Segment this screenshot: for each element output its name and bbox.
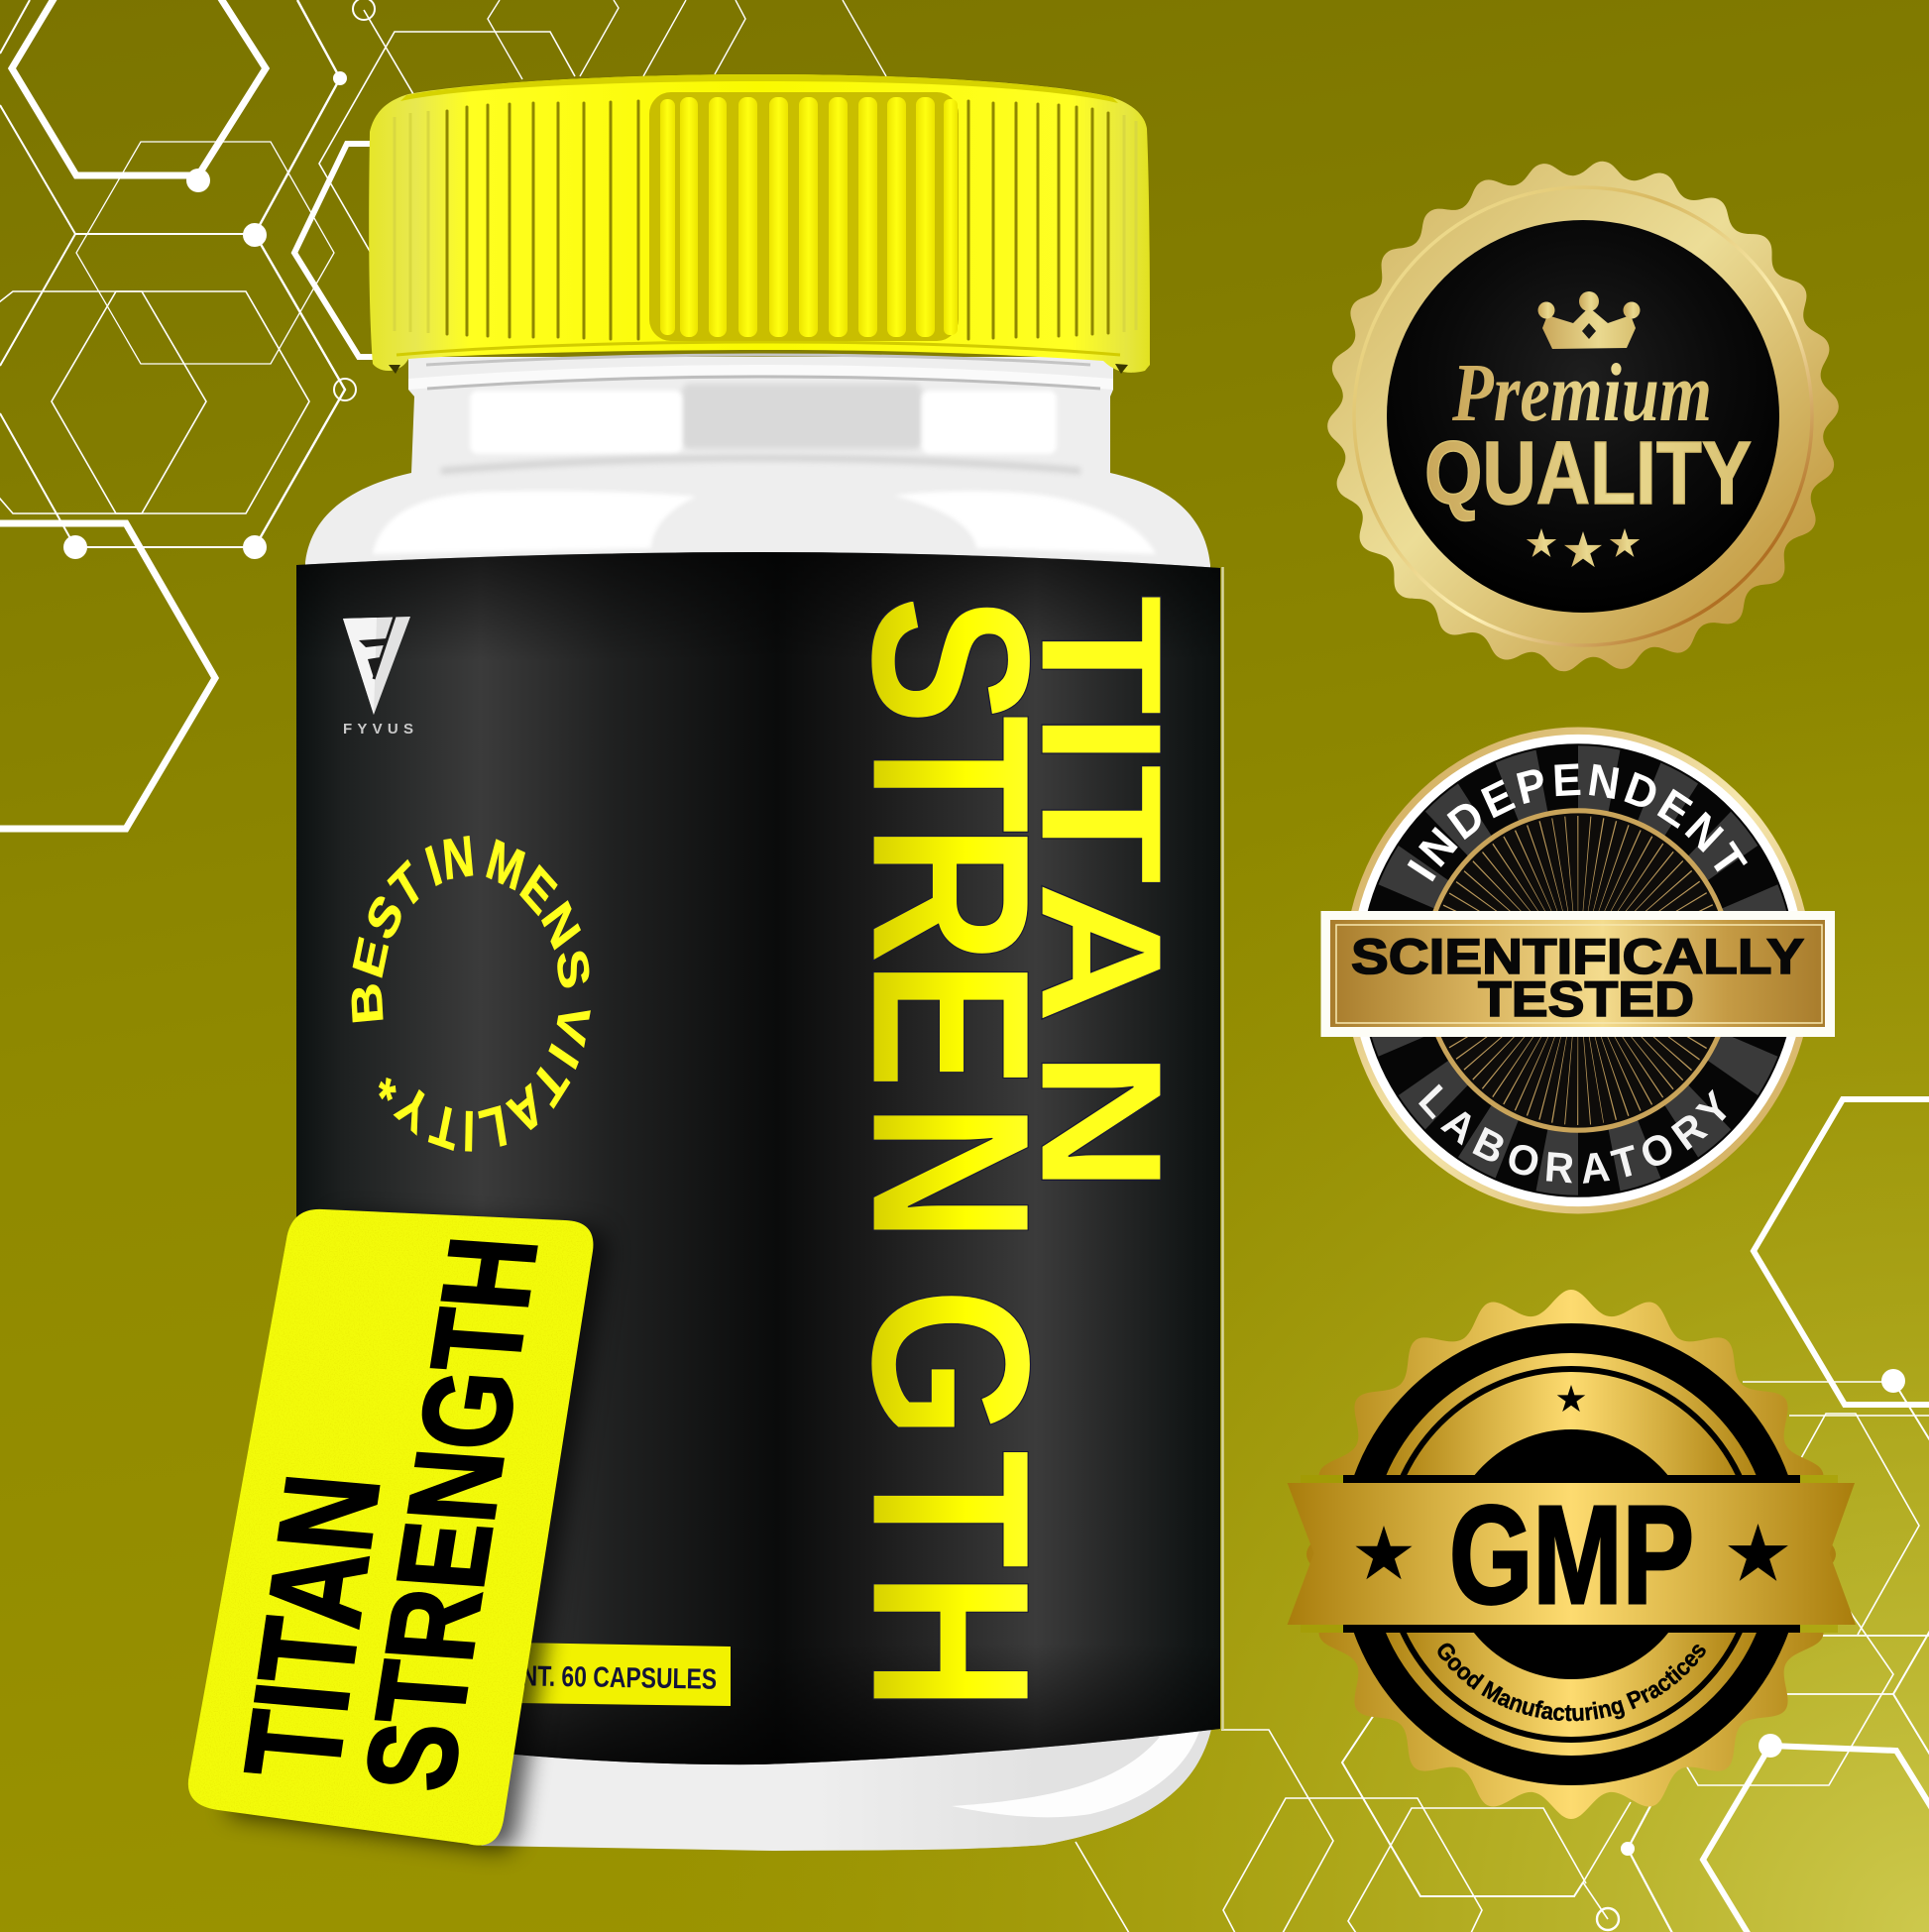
bottle cap: [369, 74, 1150, 374]
wing gaps: [1301, 1475, 1838, 1633]
badge: scientifically tested: [1320, 728, 1835, 1213]
cap edge ridges: [395, 111, 1136, 333]
three stars: [1527, 528, 1640, 567]
curved caption: Good Manufacturing Practices: [1437, 1644, 1706, 1721]
oval seal: [1351, 728, 1805, 1213]
badge word: Premium: Premium: [1451, 347, 1712, 439]
inner black ring: [1383, 1366, 1759, 1743]
sticker grain: [178, 1199, 605, 1859]
ribbon stars: [1355, 1524, 1788, 1581]
ribbon word: GMP: GMP: [1449, 1476, 1694, 1633]
oval seal: INDEPENDENT: [1408, 763, 1748, 882]
product bottle: [296, 355, 1223, 1851]
cap ridges: [447, 101, 1108, 339]
inner gold field: [1389, 1372, 1754, 1737]
banner: [1320, 911, 1835, 1037]
cap rim shading: [400, 74, 1118, 103]
shoulder highlights: [373, 491, 1156, 554]
sticker text: STRENGTH: STRENGTH: [339, 1232, 564, 1795]
circular tagline: BEST IN MENS VITALITY*: [351, 836, 591, 1152]
banner text: [1351, 929, 1804, 1027]
black centre: [1446, 1429, 1696, 1679]
cap centre panel: [649, 92, 959, 341]
sticker shadow: [228, 1215, 607, 1851]
neck shading: [408, 355, 1113, 471]
capsule count strip: [505, 1643, 731, 1706]
hexagon network: bottom right: [1076, 1099, 1929, 1932]
icon: top star: [1557, 1385, 1585, 1412]
oval seal: LABORATORY: [1418, 1084, 1727, 1184]
gold ring: [1354, 187, 1812, 645]
logo mark: [343, 617, 410, 715]
title: [825, 595, 1198, 1712]
hexagon network: top left: [0, 0, 886, 829]
sticker text: TITAN: TITAN: [217, 1469, 408, 1783]
gold ring: [1370, 1353, 1772, 1756]
badge: premium quality: [1318, 149, 1848, 684]
cap bottom band line: [397, 342, 1120, 355]
badge: GMP: [1287, 1290, 1856, 1819]
bottom highlights: [952, 1731, 1199, 1817]
title line: STRENGTH: STRENGTH: [825, 595, 1077, 1712]
bottom shading: [813, 1729, 1211, 1850]
scalloped gold edge: [1299, 1284, 1844, 1825]
black ribbon strips: [1343, 1475, 1800, 1633]
icon: crown: [1538, 291, 1640, 349]
sticker: [178, 1199, 607, 1859]
ribbon: [1288, 1483, 1856, 1625]
cap shape: [369, 74, 1150, 373]
cap lip notches: [389, 364, 1128, 374]
title line: TITAN: TITAN: [1005, 595, 1198, 1193]
bottle body: [297, 357, 1211, 1851]
label logo: [343, 617, 413, 738]
black outer ring: [1340, 1323, 1802, 1785]
banner inner line: [1336, 925, 1822, 1023]
banner gold: [1330, 920, 1825, 1027]
banner text: SCIENTIFICALLY: [1351, 929, 1804, 984]
label vertical shading: [296, 552, 1220, 1764]
black centre: [1387, 220, 1779, 613]
capsule count strip: CNT. 60 CAPSULES: [505, 1660, 717, 1696]
sticker card: [188, 1209, 593, 1846]
scalloped gold edge: [1318, 149, 1848, 684]
badge word: QUALITY: QUALITY: [1424, 424, 1752, 523]
banner text: TESTED: [1478, 971, 1694, 1027]
logo wordmark: FYVUS: [343, 721, 413, 738]
label: [296, 552, 1220, 1764]
label right edge highlight: [1221, 567, 1224, 1730]
